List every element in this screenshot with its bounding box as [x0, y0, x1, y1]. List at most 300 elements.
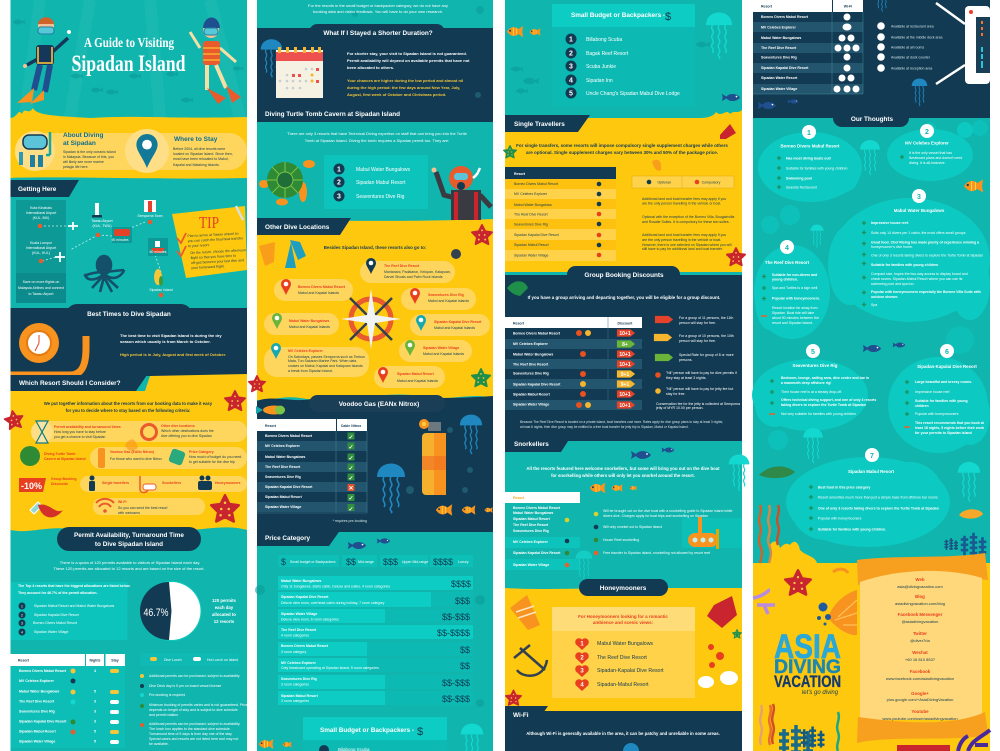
callout: tip note	[172, 206, 247, 278]
price list: $$$$	[451, 579, 471, 589]
thought 6: sipadan kapalai: Suitable for families with young	[915, 399, 968, 403]
section: which resort should I consider: Single travellers	[102, 481, 129, 485]
group discount notes: persons.	[679, 358, 692, 362]
section: which resort should I consider: Wi-Fi	[118, 500, 127, 504]
panel: top resorts: 2	[21, 614, 23, 618]
wi-fi text: Although Wi-Fi is generally available in the area, it can be patchy and unreliable in some areas.	[526, 731, 720, 736]
heading: shorter duration: What If I Stayed a Shorter Duration?	[323, 30, 433, 37]
section: which resort should I consider: Other dive locations	[161, 424, 195, 428]
table: single travellers: Sipadan Mabul Resort	[514, 243, 549, 247]
price list: Sipadan Kapalai Dive Resort	[281, 595, 329, 599]
thought 3: mabul water bungalows: Great food. Chef Rising has made plenty of experience winning a	[871, 240, 979, 244]
thought 4: the reef dive resort: Suitable for non-divers and	[772, 273, 817, 277]
text: shorter duration: Your chances are higher during the low period and almost nil	[347, 78, 463, 83]
table: snorkellers: Resort	[513, 496, 525, 500]
section: which resort should I consider: So you can send the best resort	[118, 506, 167, 510]
group discount notes	[520, 316, 740, 429]
scroll: contact details: Google+	[911, 691, 929, 696]
callout: tip note: TIP	[199, 213, 219, 232]
icons: jellyfish and fish	[377, 415, 493, 516]
price list: $$-$$$$	[437, 628, 470, 638]
panel: top resorts: Borneo Divers Mabul Resort	[33, 621, 77, 625]
section: which resort should I consider: Which other destinations does the	[161, 429, 214, 433]
price list: 3 room categories	[281, 682, 309, 686]
thought 7: sipadan mabul resort: 7	[870, 453, 874, 460]
panel: honeymooners: The Reef Dive Resort	[597, 655, 647, 661]
panel: top resorts: 1	[21, 604, 23, 608]
thought 5: seaventures dive rig: Their house reef is at a steady drop-off.	[781, 390, 842, 394]
legend and notes: single supplement	[632, 176, 734, 251]
table: group discounts: 10+1	[619, 331, 631, 337]
yellow band: about diving and where to stay: pelagic life here.	[63, 165, 89, 169]
price list: Sipadan Mabul Resort	[281, 694, 319, 698]
table: voodoo gas: Cable Nitrox	[341, 424, 361, 428]
thought 3: mabul water bungalows: Spa	[871, 303, 877, 307]
decoration: flippers, star and shells	[249, 225, 492, 392]
section: which resort should I consider: Which Resort Should I Consider?	[19, 380, 121, 387]
legend and notes: single supplement: Additional land and boat transfer fees may apply if you	[642, 197, 726, 201]
heading: permit availability: to Dive Sipadan Island	[95, 541, 163, 548]
table: voodoo gas: Sipadan Water Village	[265, 505, 301, 509]
thought 4: the reef dive resort: Sipadan. Boat ride will take	[772, 311, 814, 315]
snorkellers notes	[594, 509, 732, 555]
table: wi-fi: The Reef Dive Resort	[761, 46, 797, 50]
thought 3: mabul water bungalows: Compact size, hopes the two-way access to display board and	[871, 272, 968, 276]
scroll: contact details	[857, 553, 988, 743]
thought 6: sipadan kapalai: Large beautiful and breezy rooms.	[915, 380, 972, 384]
icon: nitrox tank	[419, 419, 446, 495]
thought 4: the reef dive resort: resort and Sipadan Island.	[772, 321, 813, 325]
table: permit allocations: Stay	[111, 658, 119, 662]
getting here map: Kota Kinabalu	[30, 206, 52, 210]
scroll: contact details: Facebook Messenger	[898, 612, 943, 617]
dive location pills: Mabul and Kapalai Islands	[428, 299, 469, 303]
table: permit allocations	[10, 654, 125, 748]
getting here map	[16, 200, 173, 303]
legend: price symbols	[278, 555, 473, 567]
section: which resort should I consider: Honeymooners	[215, 481, 241, 485]
table: group discounts: The Reef Dive Resort	[513, 362, 549, 366]
panel: top resorts: Sipadan Mabul Resort and Mabul Water Bungalows	[34, 604, 114, 608]
getting here map: 90 minutes	[111, 238, 129, 242]
icon: compass	[341, 289, 401, 349]
icon: wi-fi router	[936, 3, 990, 84]
legend: price symbols: $$$	[383, 557, 398, 567]
wi-fi text	[526, 731, 720, 751]
permit legend and notes: Additional permits can be purchased, subject to availability	[149, 674, 240, 678]
decorations	[504, 124, 745, 265]
permit legend and notes: Dive Deck day is 5 pm on board vessel license	[149, 684, 221, 688]
section: which resort should I consider: with webcams	[118, 511, 140, 515]
thought 1: borneo divers: Borneo Divers Mabul Resort	[780, 144, 840, 148]
icons: jellyfish and fish	[759, 428, 984, 519]
table: group discounts: 10+1	[619, 392, 631, 398]
table: permit allocations: MV Celebes Explorer	[19, 679, 54, 683]
table: voodoo gas: ✓	[348, 435, 354, 441]
group discount notes: Because The Reef Dive Resort is located on a private island, boat transfers cost more. Rates apply for dive group plans to stay at least 3 nights;	[520, 420, 723, 424]
legend and notes: single supplement: are the only person travelling in the vehicle or boat.	[642, 202, 721, 206]
yellow band: about diving and where to stay: will likely see more marine	[63, 160, 104, 164]
group discount notes: at least 6 nights, their dive group may be entitled to a free boat transfer for jetty trip to Sipadan, Mabul or Kapalai Island.	[520, 425, 689, 429]
banner: price category	[257, 529, 341, 546]
getting here map: (KUL, TWU)	[92, 224, 112, 228]
table: permit allocations: 5	[94, 730, 96, 734]
thought 6: sipadan kapalai: Sipadan-Kapalai Dive Resort	[917, 364, 977, 369]
legend: wi-fi: Available at dock counter	[891, 56, 931, 60]
permit text	[53, 560, 205, 571]
thought 1: borneo divers: Has most diving boats out!	[786, 156, 831, 160]
legend: wi-fi: Available at restaurant area	[891, 24, 934, 28]
panel: small budget list: 3	[569, 64, 573, 70]
table: snorkellers: Sipadan Water Village	[513, 563, 549, 567]
dive location pills: Sipadan Water Village	[423, 346, 459, 350]
diver: right	[190, 18, 241, 104]
scroll: contact details: www.youtube.com/user/asiadivingvacation	[882, 716, 958, 721]
table: group discounts: Sipadan Kapalai Dive Resort	[513, 382, 561, 386]
table: group discounts: Sipadan Mabul Resort	[513, 392, 551, 396]
permit legend and notes	[140, 653, 248, 746]
table: snorkellers: MV Celebes Explorer	[513, 540, 548, 544]
getting here map: Malaysia Airlines and connect	[18, 286, 64, 290]
icons: blue fish	[863, 342, 905, 352]
scroll: contact details: plus.google.com/+AsiaDivingVacation	[887, 697, 953, 702]
dive location pills: Sipadan Mabul Resort	[397, 372, 435, 376]
getting here map: Save on more flights on	[23, 280, 59, 284]
banner: turtle tomb	[257, 106, 429, 122]
thought 1: borneo divers: Suitable for families with young children	[786, 166, 848, 170]
snorkellers notes: Will be brought out on the dive boat with a snorkelling guide to Sipadan Island while	[603, 509, 732, 513]
legend: price symbols: $	[281, 557, 286, 567]
table: voodoo gas: MV Celebes Explorer	[265, 444, 300, 448]
thought 7: sipadan mabul resort	[809, 448, 939, 532]
section: which resort should I consider: -10%	[21, 481, 42, 491]
thought 2: mv celebes explorer: 2	[925, 129, 929, 136]
heading: our thoughts: Our Thoughts	[851, 116, 894, 123]
pie chart: 46.7%: each day	[215, 605, 234, 610]
thought 3: mabul water bungalows: Impressive house reef.	[871, 221, 909, 225]
text: shorter duration: Permit availability will depend on available permits that have not	[347, 58, 470, 63]
decoration: seaweed and coral top	[759, 505, 779, 563]
icon: submarine	[682, 517, 742, 549]
panel: small budget list: 5	[569, 90, 573, 98]
legend and notes: single supplement: Optional with the exception of the Borneo Villa, Bougainvilla	[642, 215, 734, 219]
icon: technical diver	[432, 166, 491, 220]
header title: Sipadan Island	[72, 51, 186, 76]
text: shorter duration: August, first week of October and Christmas period.	[347, 92, 446, 97]
text: besides sipadan: Besides Sipadan Island, these resorts also go to:	[324, 245, 427, 250]
price list: Deluxe view room, overhead cabin during holiday, 7 room category	[281, 601, 385, 605]
section: which resort should I consider: Group Booking	[51, 477, 76, 481]
column 3: background	[505, 0, 742, 751]
getting here map: 60 minutes	[149, 250, 167, 254]
dive location pills: Darvel Shoals and Palm Rock Islands	[384, 275, 443, 279]
thought 2: mv celebes explorer	[900, 124, 962, 165]
section: which resort should I consider: dive offering you to dive Sipadan	[161, 434, 212, 438]
table: wi-fi: Resort	[761, 4, 773, 8]
legend and notes: single supplement: However, there is one selected on Sipadan where you will	[642, 243, 732, 247]
panel: small budget list: 1	[569, 36, 573, 44]
thought 4: the reef dive resort	[761, 240, 820, 325]
price list: Sipadan Water Village	[281, 612, 317, 616]
price list: $$-$$$	[442, 612, 470, 622]
table: group discounts: Discount	[618, 322, 633, 326]
yellow band: about diving and where to stay: located on Sipadan Island. Since then,	[173, 152, 233, 156]
thought 2: mv celebes explorer: diving. It is all-inclusive.	[909, 161, 946, 165]
thought 3: mabul water bungalows	[862, 189, 983, 307]
banner: getting here	[10, 180, 79, 197]
snorkellers notes: Will only snorkel out to Sipadan Island	[603, 525, 662, 529]
table: group discounts: Borneo Divers Mabul Resort	[513, 332, 561, 336]
scroll: contact details: Blog	[915, 594, 925, 599]
table: single travellers: Sipadan Kapalai Dive Resort	[514, 233, 559, 237]
price list: 3 room categories	[281, 699, 309, 703]
table: permit allocations: Mabul Water Bungalows	[19, 690, 59, 694]
table: permit allocations: Resort	[18, 658, 30, 662]
thought 3: mabul water bungalows: Mabul Water Bungalows	[894, 208, 945, 213]
heading: honeymooners	[579, 579, 668, 596]
table: single travellers: The Reef Dive Resort	[514, 212, 548, 216]
callout: tip note: to your resort.	[188, 243, 210, 248]
thought 3: mabul water bungalows: outdoor shower.	[871, 295, 898, 299]
table: wi-fi: Wi-Fi	[844, 4, 852, 8]
panel: small budget list: 4	[569, 78, 573, 84]
panel: honeymooners: 4	[580, 682, 584, 688]
thought 6: sipadan kapalai: for your permits to Sipadan Island	[915, 431, 972, 435]
icons: fish and jelly	[507, 12, 740, 101]
table: voodoo gas: Sipadan Mabul Resort	[265, 495, 303, 499]
legend: wi-fi	[877, 22, 943, 72]
table: wi-fi: Borneo Divers Mabul Resort	[761, 15, 809, 19]
panel: small budget list: Uncle Chang's Sipadan Mabul Dive Lodge	[586, 91, 680, 97]
scroll: contact details: asia@divingvacation.com	[897, 584, 943, 589]
table: voodoo gas: Borneo Divers Mabul Resort	[265, 434, 313, 438]
dive location pills: On Saturdays, passes Semporna such as Timbun	[288, 355, 365, 359]
price list: $$-$$$	[442, 678, 470, 688]
column 2: background	[255, 0, 493, 751]
section: which resort should I consider: Snorkellers	[162, 481, 181, 485]
section: which resort should I consider	[3, 374, 247, 531]
price list: The Reef Dive Resort	[281, 628, 317, 632]
icons: blue fish	[348, 538, 390, 549]
table: permit allocations: Sipadan Kapalai Dive Resort	[19, 720, 67, 724]
section: best times to dive: season which usually is from March to October.	[120, 339, 211, 344]
logo: asia diving vacation: let's go diving	[802, 690, 839, 696]
table: wi-fi: Sipadan Water Resort	[761, 76, 798, 80]
logo: asia diving vacation	[774, 628, 841, 696]
thought 3: mabul water bungalows: Suitable for families with young children	[871, 263, 938, 267]
legend and notes: single supplement: still have to pay for additional land and boat transfer.	[642, 247, 723, 251]
panel: honeymooners: Sipadan-Mabul Resort	[597, 682, 649, 688]
panel: top resorts: Sipadan Kapalai Dive Resort	[34, 613, 79, 617]
permit legend and notes: The lunch box applies to the standard dive schedule.	[149, 727, 231, 731]
group discount notes: they stay at least 3 nights.	[666, 376, 706, 380]
thought 3: mabul water bungalows: honeymooner's dive home.	[871, 245, 913, 249]
table: wi-fi: Seaventures Dive Rig	[761, 56, 797, 60]
decoration: bottom seaweed and corals	[760, 704, 990, 751]
thought 7: sipadan mabul resort: Best food in this price category	[818, 486, 870, 490]
legend: price symbols: Mid-range	[358, 560, 374, 564]
panel: small budget list: $	[665, 11, 671, 23]
banner: other dive locations	[257, 218, 351, 235]
table: permit allocations: Sipadan Mabul Resort	[19, 730, 57, 734]
panel: honeymooners: For Honeymooners looking for a romantic	[578, 614, 668, 619]
yellow band: about diving and where to stay: Before 2004, all dive resorts were	[173, 147, 225, 151]
scroll: contact details: +60 16 810 8537	[905, 657, 936, 662]
snorkellers notes: Free transfer to Sipadan Island, snorkelling not allowed by resort reef	[603, 551, 710, 555]
thought 6: sipadan kapalai: children	[915, 404, 929, 408]
pie chart: 46.7%	[140, 581, 237, 641]
table: voodoo gas: ✓	[348, 445, 354, 451]
permit legend and notes: Dive Lunch	[164, 658, 182, 662]
table: voodoo gas: Mabul Water Bungalows	[265, 455, 305, 459]
pie chart: 46.7%: 46.7%	[144, 607, 169, 619]
legend and notes: single supplement: are the only person travelling in the vehicle or boat.	[642, 238, 721, 242]
thought 7: sipadan mabul resort: Popular with honeymooners	[818, 516, 862, 520]
table: voodoo gas: * requires pre-booking	[333, 519, 367, 523]
heading: group booking: Group Booking Discounts	[584, 272, 664, 279]
table: voodoo gas: Seaventures Dive Rig	[265, 475, 301, 479]
scroll: contact details: Youtube	[911, 709, 929, 714]
snorkellers notes: House Reef snorkelling	[603, 538, 639, 542]
group discount notes: For a group of 10 persons, the 10th	[679, 334, 734, 338]
thought 4: the reef dive resort: about 90 minutes between the	[772, 316, 819, 320]
thought 4: the reef dive resort: The Reef Dive Resort	[765, 260, 810, 265]
permit legend and notes: Minimum booking of permits varies and is not guaranteed. Price	[149, 703, 248, 707]
group intro text	[507, 281, 720, 300]
dive location pills: a break from Sipadan Island.	[288, 369, 333, 373]
panel: top resorts	[10, 582, 130, 640]
section: best times to dive: High period is in July, August and first week of October.	[120, 352, 226, 357]
icons: fish and jelly	[259, 724, 483, 751]
permit legend and notes: depends on length of stay and is subject to dive schedule	[149, 708, 238, 712]
legend and notes: single supplement: Additional land and boat transfer fees may apply if you	[642, 233, 726, 237]
legend: wi-fi: Available at all rooms	[891, 46, 924, 50]
thought 5: seaventures dive rig: taking divers to explore the Turtle Tomb at Sipadan	[781, 403, 866, 407]
diver: left	[17, 17, 71, 104]
thought 1: borneo divers: Swimming pool	[786, 176, 812, 180]
thought 7: sipadan mabul resort: Suitable for families with young children.	[818, 528, 886, 532]
group discount notes: "Nil" person will have to pay for dive permits if	[666, 371, 737, 375]
table: permit allocations: 3	[94, 710, 96, 714]
dive location pills: cruises on Mabul, Kapalai and Kalapuan Islands	[288, 364, 363, 368]
thought 6: sipadan kapalai: least 18 nights, 5 nights before their work	[915, 426, 984, 430]
table: permit allocations: 5	[94, 690, 96, 694]
group discount notes: Conservation fee for the jetty is collected at Semporna	[656, 402, 740, 406]
text: shorter duration: For shorter stay, your visit to Sipadan Island is not guaranteed.	[347, 51, 467, 56]
thought 4: the reef dive resort: Resort location far away from	[772, 306, 818, 310]
panel: top resorts: The Top 4 resorts that have the biggest allocations are listed below.	[18, 584, 130, 588]
legend: price symbols: Upper Mid-range	[402, 560, 428, 564]
panel: turtle tomb resorts: Mabul Water Bungalows	[356, 167, 411, 173]
section: which resort should I consider: Voodoo Gas (EANx Nitrox)	[110, 450, 154, 454]
section: which resort should I consider: Diving Turtle Tomb	[44, 452, 75, 456]
snorkellers text: All the resorts featured here welcome snorkellers, but some will bring you out on the dive boat	[526, 466, 720, 471]
panel: turtle tomb resorts: 2	[337, 180, 341, 186]
heading: permit availability: Permit Availability, Turnaround Time	[74, 532, 184, 539]
thought 5: seaventures dive rig: Seaventures Dive Rig	[793, 363, 838, 368]
icon: orange fish	[964, 179, 983, 193]
price list: Only 11 bungalows, starts cabin, Deluxe and suites, 4 room categories	[281, 584, 390, 588]
getting here map: (KUL, KUL)	[32, 251, 50, 255]
icon: turtle	[259, 160, 315, 206]
group discount notes: For a group of 11 persons, the 11th	[679, 316, 733, 320]
price list: $$$	[455, 596, 470, 606]
thought 6: sipadan kapalai: This resort recommends that you book at	[915, 421, 985, 425]
price list: Seaventures Dive Rig	[281, 677, 317, 681]
panel: top resorts: They account for 46.7% of the permit allocation.	[18, 591, 98, 595]
heading: shorter duration	[309, 24, 445, 41]
thought 5: seaventures dive rig: 5	[811, 349, 815, 356]
table: voodoo gas: ✓	[348, 456, 354, 462]
dive location pills: Mantanani, Padalarun, Kelopan, Kalapuan,	[384, 270, 451, 274]
section: best times to dive: Best Times to Dive Sipadan	[87, 311, 171, 318]
table: snorkellers: The Reef Dive Resort	[513, 523, 549, 527]
table: group discounts: MV Celebes Explorer	[513, 342, 548, 346]
price list: 4 room categories	[281, 634, 309, 638]
table: permit allocations: Sipadan Water Village	[19, 740, 55, 744]
table: single travellers: Seaventures Dive Rig	[514, 222, 548, 226]
thought 4: the reef dive resort: 4	[785, 245, 789, 252]
table: permit allocations: 4	[94, 669, 96, 673]
panel: small budget list: 2	[569, 50, 573, 58]
group discount notes: stay for free.	[666, 392, 685, 396]
dive location pills: Mabul Water Bungalows	[289, 319, 329, 323]
banner: wi-fi: Wi-Fi	[513, 712, 529, 719]
pie chart: 46.7%: allocated to	[212, 612, 236, 617]
thought 3: mabul water bungalows: 3	[917, 194, 921, 201]
thought 6: sipadan kapalai: Impressive house reef	[915, 390, 949, 394]
snorkellers notes: divers dive. Charges apply for boat trips and snorkelling on Sipadan	[603, 514, 708, 518]
table: snorkellers: Seaventures Dive Rig	[513, 529, 549, 533]
turtle tomb text: Tomb at Sipadan Island. Diving the tomb requires a Sipadan permit too. They are:	[305, 138, 449, 143]
table: group discounts: 9+1	[621, 372, 629, 378]
turtle tomb text: There are only 3 resorts that have Technical Diving expertise on staff that can bring you into the Turtle	[287, 131, 468, 136]
panel: small budget list: Billabong Scuba	[586, 37, 622, 43]
thought 7: sipadan mabul resort: Sipadan Mabul Resort	[848, 469, 895, 474]
banner: snorkellers: Snorkellers	[514, 441, 549, 448]
panel: honeymooners	[552, 607, 695, 698]
heading: group booking	[567, 266, 680, 283]
dive location pills: MV Celebes Explorer	[288, 349, 323, 353]
permit legend and notes: Hot Lunch on Island	[207, 658, 238, 662]
price list: Mabul Water Bungalows	[281, 579, 321, 583]
table: group discounts: 10+1	[619, 362, 631, 368]
panel: small budget (top)	[303, 717, 447, 751]
scroll: contact details: asiadivingvacation.com/blog	[895, 601, 945, 606]
getting here map: Semporna Town	[137, 214, 163, 218]
panel: small budget list	[552, 4, 695, 106]
icon: jellyfish	[576, 550, 592, 580]
dive location pills: Mabul and Kapalai Islands	[289, 325, 330, 329]
heading: honeymooners: Honeymooners	[600, 585, 647, 592]
table: snorkellers	[505, 492, 580, 570]
icons: snorkellers fish	[590, 447, 749, 493]
getting here map: International Airport	[26, 246, 56, 250]
text: shorter duration: been allocated to others.	[347, 65, 394, 70]
table: voodoo gas: ✓	[348, 507, 354, 513]
banner: single travellers: Single Travellers	[514, 121, 565, 128]
table: single travellers: MV Celebes Explorer	[514, 192, 548, 196]
section: which resort should I consider: Permit availability and turnaround times	[54, 425, 121, 429]
section: which resort should I consider: you get a chance to visit Sipadan	[54, 435, 105, 439]
yellow band: about diving and where to stay: Kapalai and Mataking Islands.	[173, 163, 220, 167]
icon: octopus	[84, 256, 124, 292]
thought 2: mv celebes explorer: It is the only vessel that has	[909, 151, 952, 155]
thought 4: the reef dive resort: Spa and Turtles is a sign well	[772, 286, 818, 290]
permit legend and notes: Special cases and resorts are not listed here and may not	[149, 737, 238, 741]
callout: tip note: On the return, choose the afternoon	[190, 248, 246, 255]
banner: price category: Price Category	[265, 535, 311, 542]
